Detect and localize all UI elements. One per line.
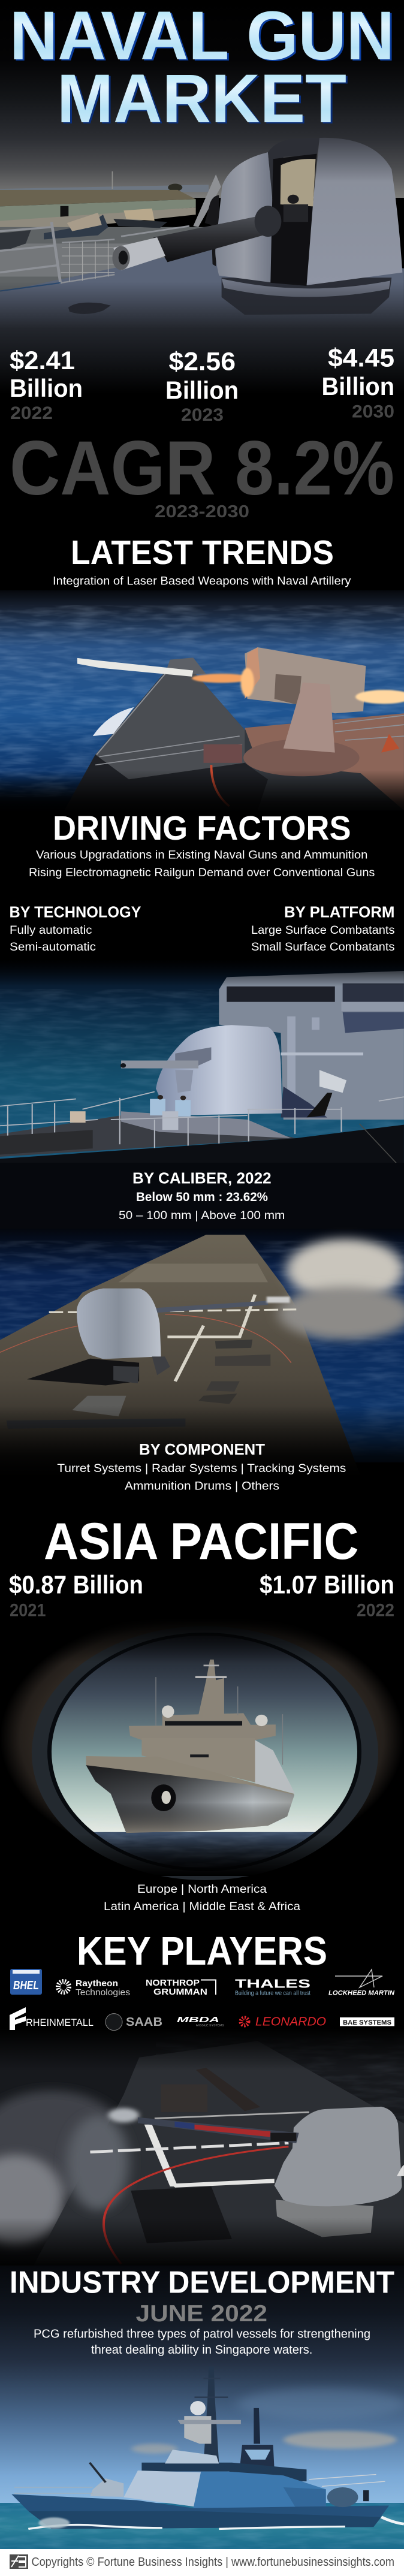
photo: deck gun on frigate xyxy=(0,959,404,1238)
heading: asia pacific with regional values: 2022 xyxy=(357,1601,394,1621)
logo: MBDA: MBDA xyxy=(177,2015,219,2024)
photo: sea and missile launch on ship xyxy=(0,590,404,815)
heading: by caliber xyxy=(119,1171,285,1222)
logo: Thales xyxy=(235,1978,310,1997)
heading: driving factors: DRIVING FACTORS xyxy=(53,809,351,847)
logo: Saab xyxy=(105,2014,162,2031)
logo: Northrop Grumman xyxy=(146,1978,216,1997)
heading: driving factors: Rising Electromagnetic Railgun Demand over Conventional Guns xyxy=(29,866,375,879)
title: NAVAL GUN MARKET xyxy=(10,0,396,138)
market stat: 2030 xyxy=(321,344,394,422)
logo: Lockheed Martin: LOCKHEED MARTIN xyxy=(328,1990,395,1997)
heading: latest trends: Integration of Laser Based Weapons with Naval Artillery xyxy=(53,575,351,588)
porthole photo: supply ship at sea xyxy=(0,1618,404,1880)
other regions list: Latin America | Middle East & Africa xyxy=(104,1900,300,1913)
logo: BAE Systems: BAE SYSTEMS xyxy=(343,2019,391,2026)
market stat: 2023: $2.56 xyxy=(169,348,236,376)
heading: asia pacific with regional values xyxy=(9,1513,394,1621)
other regions list: Europe | North America xyxy=(137,1883,267,1896)
segment: by platform xyxy=(251,904,395,954)
heading: industry development: threat dealing ability in Singapore waters. xyxy=(91,2343,312,2357)
logo: Saab: SAAB xyxy=(126,2016,162,2029)
market stat: 2023 xyxy=(165,348,239,425)
logo: Rheinmetall: RHEINMETALL xyxy=(26,2017,94,2028)
heading: latest trends: LATEST TRENDS xyxy=(71,533,334,572)
CAGR callout: 2023-2030 xyxy=(155,502,249,521)
segment: by technology xyxy=(10,904,141,954)
heading: by caliber: Below 50 mm : 23.62% xyxy=(136,1190,268,1204)
segment: by technology: Semi-automatic xyxy=(10,940,96,954)
heading: asia pacific with regional values: 2021 xyxy=(10,1601,46,1621)
photo: gun firing on deck at night xyxy=(0,2029,404,2269)
segment: by platform: BY PLATFORM xyxy=(284,904,394,921)
segment: by platform: Large Surface Combatants xyxy=(251,924,395,937)
market stat: 2022: $2.41 xyxy=(10,346,75,375)
logo: Northrop Grumman: NORTHROP xyxy=(146,1978,200,1988)
heading: industry development: INDUSTRY DEVELOPMENT xyxy=(10,2266,394,2300)
heading: by component: Ammunition Drums | Others xyxy=(125,1479,279,1492)
heading: driving factors: Various Upgradations in Existing Naval Guns and Ammunition xyxy=(36,848,367,861)
heading: by component: BY COMPONENT xyxy=(139,1441,265,1458)
segment: by platform: Small Surface Combatants xyxy=(251,940,395,954)
heading: industry development: PCG refurbished three types of patrol vessels for strengthening xyxy=(34,2328,370,2341)
title: NAVAL GUN MARKET: MARKET xyxy=(57,61,346,137)
segment: by technology: BY TECHNOLOGY xyxy=(10,904,141,921)
market stat: 2030: Billion xyxy=(321,372,394,400)
heading: asia pacific with regional values: ASIA PACIFIC xyxy=(44,1513,358,1570)
hero photo: naval gun on ship deck xyxy=(0,0,404,394)
logo: Leonardo: LEONARDO xyxy=(255,2015,326,2028)
other regions list xyxy=(104,1883,300,1913)
logo: BAE Systems xyxy=(340,2017,394,2026)
title: NAVAL GUN MARKET: NAVAL GUN xyxy=(11,0,396,76)
market stat: 2022: Billion xyxy=(10,374,83,402)
photo: corvette with helicopter at sea xyxy=(0,2266,404,2550)
heading: latest trends xyxy=(53,533,351,588)
heading: industry development xyxy=(10,2266,394,2357)
logo: MBDA xyxy=(177,2015,224,2027)
heading: by caliber: 50 – 100 mm | Above 100 mm xyxy=(119,1209,285,1222)
heading: asia pacific with regional values: $0.87 Billion xyxy=(9,1571,143,1600)
market stat: 2030: $4.45 xyxy=(328,344,394,373)
logo: BHEL: BHEL xyxy=(13,1979,39,1992)
segment: by technology: Fully automatic xyxy=(10,924,92,937)
logos: key player companies xyxy=(10,1969,395,2031)
market stat: 2022: 2022 xyxy=(10,403,53,423)
logo: MBDA: MISSILE SYSTEMS xyxy=(196,2023,224,2027)
icon: Fortune Business Insights logo xyxy=(10,2554,28,2569)
heading: by caliber: BY CALIBER, 2022 xyxy=(132,1171,272,1187)
logo: BHEL xyxy=(10,1969,42,1995)
heading: by component: Turret Systems | Radar Systems | Tracking Systems xyxy=(57,1462,346,1475)
market stat: 2022 xyxy=(10,346,83,423)
heading: driving factors xyxy=(29,809,375,879)
logo: Raytheon Technologies xyxy=(58,1978,130,1998)
logo: Raytheon Technologies: Raytheon xyxy=(76,1978,118,1989)
logo: Thales: THALES xyxy=(235,1978,310,1991)
logo: Rheinmetall xyxy=(10,2007,94,2030)
logo: Northrop Grumman: GRUMMAN xyxy=(153,1987,207,1997)
photo: destroyer firing deck gun xyxy=(0,1229,404,1477)
heading: key players: KEY PLAYERS xyxy=(77,1929,327,1974)
logo: Thales: Building a future we can all trust xyxy=(235,1990,310,1997)
logo: Raytheon Technologies: Technologies xyxy=(76,1987,130,1998)
title: NAVAL GUN MARKET: MARKET xyxy=(59,62,348,138)
market stat: 2030: 2030 xyxy=(352,402,394,422)
heading: industry development: JUNE 2022 xyxy=(135,2301,267,2327)
logo: Lockheed Martin xyxy=(328,1969,395,1997)
market stat: 2023: Billion xyxy=(165,376,239,405)
heading: by component xyxy=(57,1441,346,1492)
market stat: 2023: 2023 xyxy=(181,405,224,425)
footer: copyright bar xyxy=(0,2549,404,2576)
